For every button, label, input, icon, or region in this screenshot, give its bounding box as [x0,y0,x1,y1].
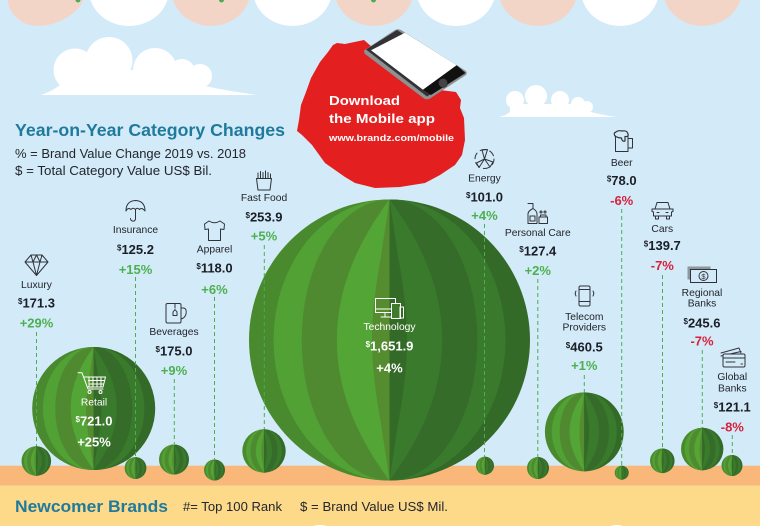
category: Cars: Cars [651,224,673,235]
category: Telecom Providers: +1% [571,358,598,373]
category: Insurance: +15% [119,262,153,277]
category: Regional Banks: 245.6 [688,316,720,331]
callout: download the mobile app [297,29,467,188]
category: Personal Care: $ [519,245,524,254]
panel: newcomer brands band [0,486,760,526]
category: Beer: $ [607,174,612,184]
melon: fast food [242,429,286,473]
melon: insurance [125,457,146,479]
category: Fast Food: 253.9 [250,210,282,225]
legend text [15,147,246,178]
icon: tea mug [166,304,186,323]
category: Apparel [196,221,233,480]
melon: energy [476,457,494,475]
category: Regional Banks: Regional [682,288,722,299]
melon: personal care [527,457,549,479]
category: Beverages: Beverages [149,327,199,338]
category: Global Banks: $ [714,401,719,410]
category: Telecom Providers: Providers [563,323,606,334]
category: Energy [466,150,503,475]
category: Beverages: 175.0 [160,344,192,359]
cloud: small [499,85,617,117]
category: Luxury: 171.3 [22,296,55,311]
category: Technology: Technology [363,322,416,333]
category: Cars: -7% [651,258,674,273]
icon: bank notes: $ [701,272,706,281]
icon: wind turbine [475,150,494,168]
cloud: large [41,37,257,95]
category: Regional Banks: -7% [690,334,714,349]
category: Apparel: $ [196,262,201,271]
category: Personal Care: 127.4 [524,244,557,259]
category: Insurance: $ [117,244,122,252]
ground strip [0,466,760,486]
category: Energy: +4% [471,208,498,223]
category: Apparel: 118.0 [201,261,233,276]
red brush blob [297,40,465,188]
category: Beer: -6% [610,193,634,208]
category: Fast Food [241,171,287,473]
melon: regional banks [681,428,723,470]
melon: global banks [722,455,742,476]
category: Global Banks: Global [717,372,747,383]
category: Technology: $ [366,340,371,349]
panel: category changes heading [15,120,285,178]
rank legend: #= Top 100 Rank [183,500,283,514]
download text: the Mobile app [329,111,435,126]
category: Beverages [149,304,199,474]
category: Regional Banks: $ [684,317,688,326]
category: Fast Food: $ [246,211,250,220]
category: Beer [607,131,637,480]
download text: Download [329,93,400,108]
category: Insurance: 125.2 [121,242,154,257]
category: Telecom Providers: 460.5 [570,340,603,355]
category: Cars: $ [644,240,649,248]
icon: fries [256,171,272,190]
category: Insurance: Insurance [113,225,158,236]
category: Apparel: Apparel [197,245,232,256]
melon: retail [32,347,155,470]
melon: beverages [159,444,189,474]
melon: luxury [22,446,51,476]
icon: smartphone [364,29,467,99]
category: Telecom Providers [545,286,624,471]
category: Energy: 101.0 [470,190,503,205]
icon: mobile phone [575,286,594,306]
category: Retail: $ [76,415,80,424]
icon: car [652,202,673,219]
value legend: $ = Brand Value US$ Mil. [300,500,448,514]
melon: telecom [545,392,624,471]
category: Global Banks [714,348,751,476]
melon: technology [249,200,530,480]
icon: devices [376,298,404,318]
category: Retail: +25% [77,435,111,450]
category: Retail: Retail [81,398,107,409]
legend text: $ = Total Category Value US$ Bil. [15,164,212,178]
category: Insurance [113,200,158,479]
category: Luxury: $ [18,297,23,306]
category: Luxury: +29% [20,316,54,331]
category: Apparel: +6% [201,282,228,297]
category: Global Banks: 121.1 [718,400,751,415]
melon: beer [615,466,629,480]
category: Personal Care: Personal Care [505,228,571,239]
download text [328,93,454,144]
category: Luxury [18,255,55,476]
icon: bank notes [688,266,716,282]
melon: apparel [204,460,225,480]
category: Regional Banks [681,266,723,470]
category: Beer: 78.0 [611,173,637,188]
icon: diamond [25,255,48,276]
title: Year-on-Year Category Changes [15,120,285,140]
category: Cars: 139.7 [648,238,681,253]
category: Fast Food: +5% [251,229,278,244]
category: Retail: 721.0 [80,414,112,429]
category: Regional Banks: Banks [688,299,716,310]
icon: beer mug [614,131,632,152]
icon: shopping cart [78,373,106,394]
category: Technology: +4% [376,361,403,376]
category: Beverages: $ [156,345,160,354]
icon: bank cards [721,348,745,367]
category: Global Banks: Banks [718,384,747,395]
icon: t-shirt [204,221,224,240]
download text: www.brandz.com/mobile [328,133,454,144]
category: Beer: Beer [611,158,633,169]
legend text: % = Brand Value Change 2019 vs. 2018 [15,147,246,161]
category: Luxury: Luxury [21,280,53,291]
category: Energy: $ [466,191,471,200]
newcomer heading: Newcomer Brands [15,497,168,516]
category: Cars [644,202,681,473]
melon: cars [650,448,675,473]
category: Telecom Providers: $ [566,341,571,350]
category: Global Banks: -8% [721,420,744,435]
icon: umbrella [126,200,145,221]
icon: soap bottle [528,204,548,224]
category: Personal Care [505,204,571,479]
category: Beverages: +9% [161,363,188,378]
category: Technology [249,200,530,480]
category: Energy: Energy [468,174,502,184]
category: Technology: 1,651.9 [370,339,413,354]
hanging top shapes [8,0,742,26]
category: Telecom Providers: Telecom [565,312,603,323]
category: Fast Food: Fast Food [241,193,287,204]
category: Personal Care: +2% [525,263,551,278]
category: Retail [32,347,155,470]
